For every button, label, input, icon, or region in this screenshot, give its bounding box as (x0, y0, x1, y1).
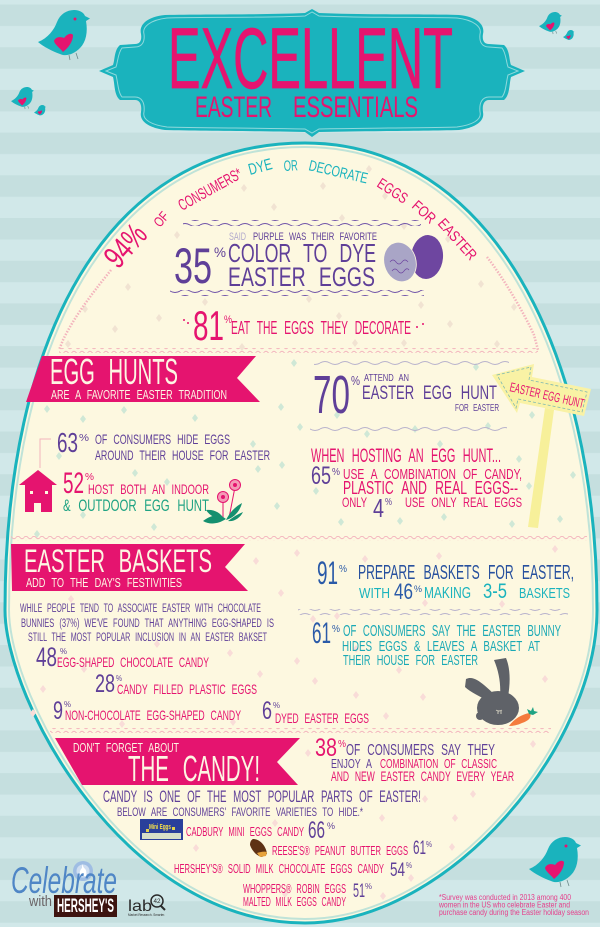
subtitle: Easter Essentials: ESSENTIALS (293, 91, 418, 124)
91% prepare baskets: 91 (317, 555, 338, 591)
35% purple stat: COLOR TO DYE (228, 238, 376, 268)
70% attend hunt: % (351, 373, 360, 388)
subtitle: Easter Essentials (195, 91, 418, 124)
logo: celebrate with hershey's: with (28, 893, 52, 910)
81% eat the eggs: 81 (193, 302, 224, 349)
61% easter bunny: % (332, 624, 340, 635)
52% indoor and outdoor: HOST BOTH AN INDOOR (88, 481, 209, 497)
70% attend hunt: 70 (313, 365, 350, 425)
63% hide eggs: AROUND THEIR HOUSE FOR EASTER (95, 447, 270, 463)
bird left small (34, 105, 46, 115)
banner: easter baskets: ADD TO THE DAY'S FESTIVITIES (26, 576, 182, 590)
banner: don't forget the candy: DON'T FORGET ABOUT (73, 741, 179, 755)
banner: egg hunts (26, 351, 260, 402)
cadbury stat: CADBURY MINI EGGS CANDY (186, 824, 304, 839)
61% easter bunny (312, 617, 561, 669)
icon: peanut butter egg (250, 839, 267, 857)
decorative diamonds (30, 165, 576, 900)
70% attend hunt: FOR EASTER (455, 403, 499, 414)
91% prepare baskets: % (414, 584, 422, 594)
52% indoor and outdoor: % (85, 472, 94, 483)
basket inclusions stats: 48 (36, 642, 57, 672)
91% prepare baskets: MAKING (424, 585, 471, 602)
cadbury stat: % (327, 821, 335, 831)
banner: don't forget the candy: THE CANDY! (128, 748, 260, 789)
when hosting an egg hunt: % (332, 467, 340, 478)
basket inclusions stats: NON-CHOCOLATE EGG-SHAPED CANDY (65, 707, 241, 723)
81% eat the eggs: % (224, 314, 232, 326)
logo: lab42: Market Research. Smarter. (128, 913, 165, 917)
icon: flowers (203, 480, 243, 523)
basket intro paragraph: BUNNIES (37%) WE'VE FOUND THAT ANYTHING EGG-SHAPED IS (21, 618, 274, 630)
whoppers stat: MALTED MILK EGGS CANDY (243, 894, 346, 909)
survey footnote: *Survey was conducted in 2013 among 400 (439, 893, 572, 902)
bird top left large (38, 10, 90, 60)
candy intro text: BELOW ARE CONSUMERS' FAVORITE VARIETIES TO HIDE.* (117, 805, 363, 819)
arched headline: 94% dye or decorate: DECORATE (307, 157, 369, 187)
arched headline: 94% dye or decorate: DYE (247, 156, 274, 179)
70% attend hunt: ATTEND AN (364, 373, 409, 384)
basket intro paragraph: WHILE PEOPLE TEND TO ASSOCIATE EASTER WITH CHOCOLATE (20, 603, 261, 615)
52% indoor and outdoor: & OUTDOOR EGG HUNT (63, 496, 209, 515)
when hosting an egg hunt: 65 (311, 462, 331, 490)
35% purple stat: 35 (174, 238, 212, 294)
survey footnote: women in the US who celebrate Easter and (438, 900, 570, 910)
63% hide eggs (40, 427, 270, 468)
banner: easter baskets (11, 543, 248, 591)
bird top right medium (539, 12, 562, 34)
subtitle: Easter Essentials: EASTER (195, 91, 272, 124)
63% hide eggs: OF CONSUMERS HIDE EGGS (95, 431, 230, 447)
when hosting an egg hunt (311, 446, 522, 523)
bird left medium (11, 87, 34, 109)
arched headline: 94% dye or decorate: OF (150, 208, 172, 230)
banner: egg hunts: ARE A FAVORITE EASTER TRADITION (51, 387, 227, 402)
hershey's stat: % (406, 861, 412, 870)
63% hide eggs: 63 (57, 427, 78, 458)
icon: cadbury mini eggs pack (140, 819, 183, 840)
basket inclusions stats: % (60, 647, 67, 656)
icon: egg hunt signpost (492, 364, 591, 528)
logo: celebrate with hershey's (11, 860, 117, 917)
35% purple stat: PURPLE WAS THEIR FAVORITE (253, 231, 377, 243)
91% prepare baskets: % (339, 564, 347, 575)
icon: dyed eggs (379, 234, 445, 285)
bird bottom right (529, 837, 581, 887)
when hosting an egg hunt: USE A COMBINATION OF CANDY, (343, 466, 522, 483)
title plaque (99, 9, 525, 137)
whoppers stat: 51 (353, 881, 365, 902)
70% attend hunt: EASTER EGG HUNT (362, 383, 497, 404)
70% attend hunt (310, 360, 509, 431)
52% indoor and outdoor (63, 467, 209, 515)
basket inclusions stats: DYED EASTER EGGS (275, 710, 369, 726)
52% indoor and outdoor: 52 (63, 467, 84, 500)
arched headline: 94% dye or decorate: 94% (96, 216, 154, 275)
35% purple stat: % (214, 244, 226, 260)
logo: lab42: lab (128, 898, 152, 915)
candy intro text (103, 787, 421, 819)
hershey's stat (174, 860, 412, 881)
logo: celebrate with hershey's: Celebrate (11, 860, 117, 901)
banner: don't forget the candy (55, 738, 300, 789)
91% prepare baskets: WITH (359, 585, 390, 602)
reese's stat: 61 (413, 838, 426, 859)
logo: lab42: 42 (154, 899, 161, 905)
basket intro paragraph (20, 603, 274, 644)
when hosting an egg hunt: 4 (373, 493, 384, 523)
arched headline: 94% dye or decorate: EGGS (374, 175, 411, 207)
icon: bunny with carrot (465, 658, 538, 726)
basket inclusions stats (36, 642, 369, 726)
38% classic and new candy (315, 734, 514, 784)
35% purple stat (170, 220, 445, 296)
91% prepare baskets: 46 (394, 579, 413, 604)
38% classic and new candy: ENJOY A (331, 756, 372, 771)
basket inclusions stats: % (116, 674, 122, 683)
hershey's stat: 54 (390, 860, 405, 881)
bird top right small (563, 30, 574, 40)
cadbury stat (186, 817, 335, 844)
35% purple stat: SAID (229, 231, 246, 243)
arched headline: 94% dye or decorate: CONSUMERS* (176, 166, 245, 214)
reese's stat: REESE'S® PEANUT BUTTER EGGS (272, 843, 408, 858)
61% easter bunny: 61 (312, 617, 331, 650)
when hosting an egg hunt: ONLY (342, 494, 367, 510)
35% purple stat: EASTER EGGS (228, 262, 375, 292)
81% eat the eggs: EAT THE EGGS THEY DECORATE (231, 318, 411, 338)
basket inclusions stats: 6 (262, 697, 272, 725)
38% classic and new candy: 38 (315, 734, 337, 762)
banner: easter baskets: EASTER BASKETS (24, 543, 212, 579)
61% easter bunny: THEIR HOUSE FOR EASTER (343, 652, 478, 669)
arched headline: 94% dye or decorate: OR (283, 157, 298, 175)
63% hide eggs: % (79, 433, 89, 444)
91% prepare baskets: BASKETS (519, 585, 570, 602)
whoppers stat: % (365, 882, 372, 891)
banner: egg hunts: EGG HUNTS (50, 351, 178, 392)
hershey's stat: HERSHEY'S® SOLID MILK CHOCOLATE EGGS CANDY (174, 861, 384, 876)
basket inclusions stats: 28 (95, 670, 115, 698)
logo: lab42 (128, 895, 165, 917)
dome border and section dividers (11, 257, 587, 733)
reese's stat: % (426, 840, 432, 849)
81% eat the eggs (183, 302, 424, 349)
when hosting an egg hunt: % (385, 497, 392, 508)
when hosting an egg hunt: USE ONLY REAL EGGS (405, 494, 522, 510)
icon: house (19, 470, 57, 512)
basket intro paragraph: STILL THE MOST POPULAR INCLUSION IN AN EASTER BAKSET (28, 632, 267, 644)
icon: cadbury mini eggs pack: Mini Eggs (149, 822, 171, 831)
survey footnote (438, 893, 589, 917)
basket inclusions stats: % (64, 700, 71, 709)
when hosting an egg hunt: PLASTIC AND REAL EGGS-- (343, 478, 518, 498)
91% prepare baskets (298, 555, 574, 615)
38% classic and new candy: OF CONSUMERS SAY THEY (346, 742, 495, 759)
logo: celebrate with hershey's: HERSHEY'S (57, 896, 114, 917)
basket inclusions stats: EGG-SHAPED CHOCOLATE CANDY (57, 654, 209, 670)
91% prepare baskets: 3-5 (483, 580, 507, 603)
basket inclusions stats: 9 (53, 697, 63, 725)
basket inclusions stats: CANDY FILLED PLASTIC EGGS (117, 681, 257, 697)
arched headline: 94% dye or decorate: FOR (408, 197, 439, 227)
38% classic and new candy: % (338, 739, 346, 750)
basket inclusions stats: % (273, 701, 280, 710)
whoppers stat: WHOPPERS® ROBIN EGGS (243, 881, 346, 896)
arched headline: 94% dye or decorate: EASTER (434, 215, 480, 264)
38% classic and new candy: COMBINATION OF CLASSIC (380, 756, 497, 771)
arched headline: 94% dye or decorate (96, 156, 480, 275)
reese's stat (272, 838, 432, 859)
cadbury stat: 66 (308, 817, 325, 844)
whoppers stat (243, 881, 372, 909)
